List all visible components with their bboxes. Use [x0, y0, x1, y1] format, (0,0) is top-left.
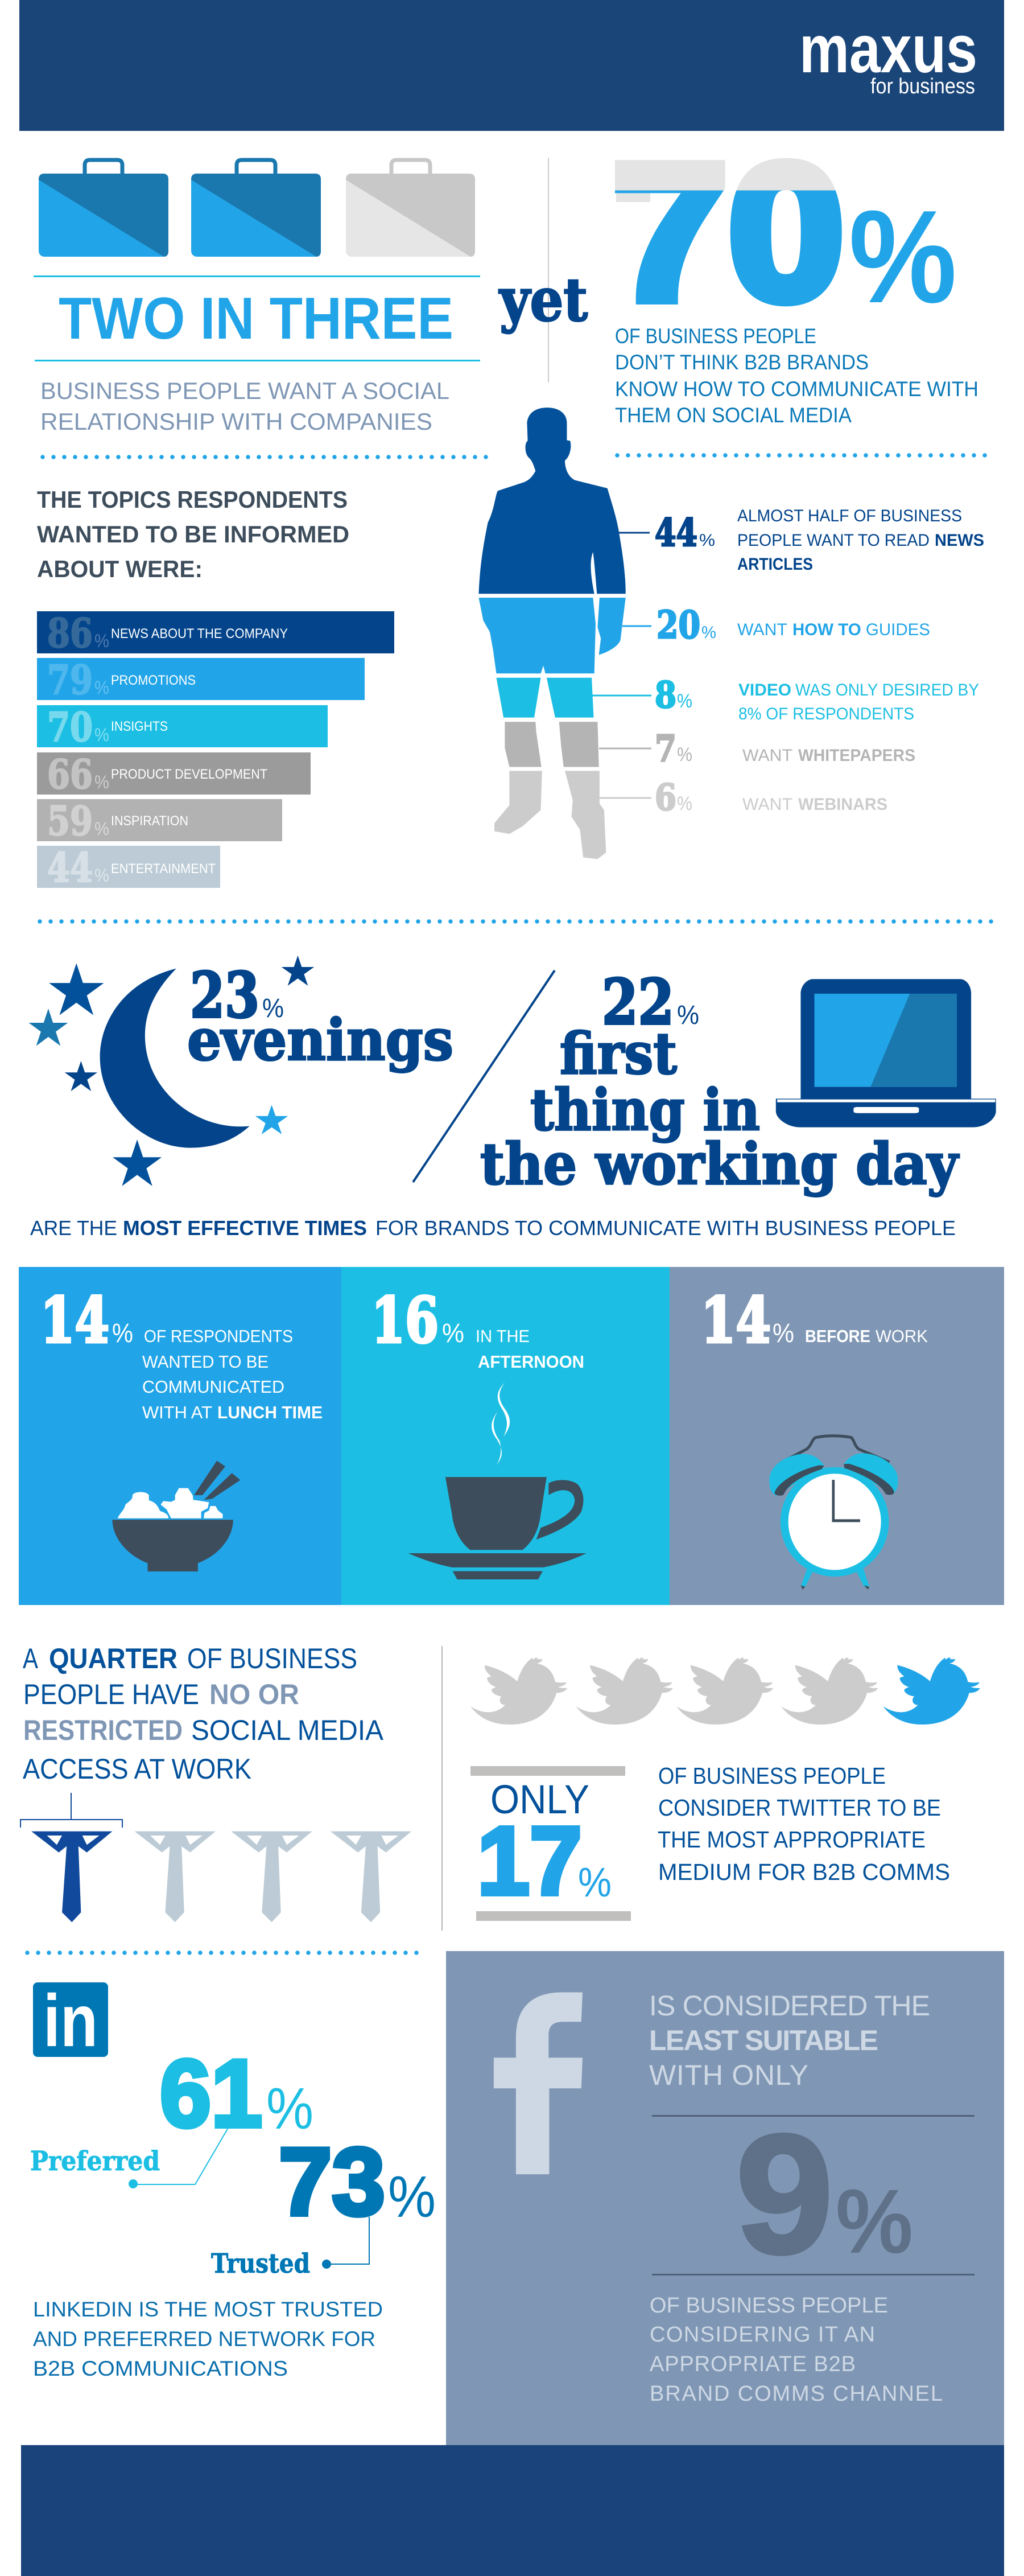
yet connector word: yet: [498, 265, 588, 335]
text: twitter description: MEDIUM FOR B2B COMMS: [658, 1859, 950, 1885]
text: a quarter have restricted access: QUARTER: [49, 1643, 177, 1674]
stat: 20 percent how to guides: %: [701, 623, 716, 642]
stat: 6 percent webinars: WEBINARS: [798, 795, 887, 814]
text: linkedin description: [33, 2298, 383, 2380]
bar: inspiration: %: [94, 818, 109, 839]
text: most effective times: [30, 1216, 956, 1240]
text: most effective times: MOST EFFECTIVE TIMES: [123, 1216, 367, 1240]
bar chart: topics: [37, 610, 394, 891]
stat: 23 percent evenings: 23: [190, 958, 259, 1032]
text: most effective times: FOR BRANDS TO COMMUNICATE WITH BUSINESS PEOPLE: [375, 1216, 956, 1240]
text: a quarter have restricted access: SOCIAL MEDIA: [191, 1714, 384, 1746]
stat: 20 percent how to guides: [656, 603, 930, 647]
text: a quarter have restricted access: ACCESS AT WORK: [23, 1753, 251, 1785]
stat: 8 percent video: 8% OF RESPONDENTS: [738, 705, 914, 723]
stat: 22 percent first thing in the working day: first: [560, 1020, 677, 1087]
bar: news about the company: [37, 610, 394, 657]
stat: only 17 percent: 17: [477, 1807, 582, 1915]
panel: before work: %: [773, 1318, 794, 1348]
stat: 44 percent news articles: NEWS: [935, 531, 984, 550]
bar: entertainment: [37, 844, 220, 891]
bar: news about the company: NEWS ABOUT THE COMPANY: [111, 626, 288, 641]
stat: 44 percent news articles: ARTICLES: [737, 555, 813, 574]
text: social relationship: RELATIONSHIP WITH COMPANIES: [40, 408, 432, 435]
bar: entertainment: 44: [47, 844, 93, 891]
stat: 61 percent preferred: Preferred: [30, 2146, 160, 2177]
stat: 23 percent evenings: evenings: [187, 1006, 453, 1073]
icon: alarm clock: [769, 1436, 898, 1590]
bar: inspiration: 59: [47, 797, 93, 845]
text: social relationship: [40, 377, 449, 435]
stat: 8 percent video: [655, 674, 979, 723]
stat: 23 percent evenings: %: [262, 993, 284, 1023]
stat: 44 percent news articles: %: [699, 531, 715, 550]
stat: 73 percent trusted: %: [388, 2164, 436, 2229]
bar: insights: 70: [47, 703, 93, 751]
stat: 7 percent whitepapers: WHITEPAPERS: [798, 746, 915, 765]
panel: before work: 14: [701, 1283, 771, 1357]
text: linkedin description: LINKEDIN IS THE MOST TRUSTED: [33, 2298, 383, 2321]
figure: segmented person silhouette: [478, 408, 626, 859]
panel: before work: BEFORE: [805, 1326, 870, 1346]
icon: laptop: [776, 979, 996, 1127]
text: a quarter have restricted access: NO OR: [209, 1678, 299, 1710]
panel: afternoon: 16: [371, 1283, 439, 1357]
panel: lunch time: %: [112, 1318, 133, 1348]
heading: topics: WANTED TO BE INFORMED: [37, 521, 349, 548]
icon: crescent moon and stars: [29, 956, 314, 1186]
header band with logo: [19, 0, 1004, 131]
panel: facebook: LEAST SUITABLE: [649, 2024, 878, 2056]
panel: lunch time: LUNCH TIME: [217, 1402, 323, 1422]
text: 70 percent description: KNOW HOW TO COMMUNICATE WITH: [615, 377, 978, 401]
bar: insights: INSIGHTS: [111, 719, 168, 734]
bar: inspiration: [37, 797, 282, 845]
stat: only 17 percent: [470, 1766, 631, 1921]
stat: 44 percent news articles: [655, 507, 984, 574]
stat: 20 percent how to guides: HOW TO GUIDES: [792, 620, 930, 639]
icon: facebook f: [494, 1993, 583, 2174]
bar: product development: 66: [47, 751, 93, 798]
panel: before work: WORK: [876, 1326, 928, 1346]
stat: 20 percent how to guides: WANT: [737, 620, 787, 639]
logo: maxus: maxus: [799, 11, 977, 87]
stat: 6 percent webinars: [655, 776, 887, 819]
panel: facebook: IS CONSIDERED THE: [649, 1990, 930, 2022]
stat: 22 percent first thing in the working day: 22: [602, 965, 674, 1039]
panel: facebook: %: [836, 2170, 913, 2272]
text: a quarter have restricted access: [23, 1643, 384, 1785]
bar: promotions: PROMOTIONS: [111, 673, 196, 688]
bar: product development: PRODUCT DEVELOPMENT: [111, 767, 267, 782]
stat: 44 percent news articles: PEOPLE WANT TO READ: [737, 531, 930, 550]
bar: news about the company: %: [94, 631, 109, 651]
icon: rice bowl with chopsticks: [112, 1461, 240, 1571]
panel: facebook: OF BUSINESS PEOPLE: [650, 2294, 888, 2318]
stat: 44 percent news articles: ALMOST HALF OF BUSINESS: [737, 507, 962, 525]
text: 70 percent description: OF BUSINESS PEOPLE: [615, 324, 816, 348]
panel: facebook: BRAND COMMS CHANNEL: [650, 2382, 943, 2406]
stat: only 17 percent: %: [578, 1860, 612, 1906]
stat: 8 percent video: 8: [655, 674, 676, 717]
icon: bracket above first tie: [20, 1793, 122, 1828]
text: twitter description: THE MOST APPROPRIATE: [658, 1826, 926, 1853]
stat: 44 percent news articles: 44: [655, 511, 697, 555]
text: social relationship: BUSINESS PEOPLE WANT A SOCIAL: [40, 377, 449, 404]
stat: 61 percent preferred: 61: [160, 2040, 262, 2147]
bar: product development: [37, 751, 311, 798]
stat: only 17 percent: ONLY: [490, 1777, 589, 1822]
bar: entertainment: %: [94, 865, 109, 886]
bar: promotions: 79: [47, 656, 93, 703]
heading: topics: [37, 486, 349, 582]
panel: lunch time: 14: [40, 1283, 109, 1357]
icon: five twitter birds: [470, 1657, 980, 1725]
bar: insights: [37, 703, 328, 751]
panel: afternoon: %: [442, 1318, 464, 1348]
text: twitter description: OF BUSINESS PEOPLE: [658, 1763, 886, 1789]
stat: 61 percent preferred: [30, 2040, 313, 2188]
bar: entertainment: ENTERTAINMENT: [111, 861, 216, 877]
bar: promotions: [37, 656, 365, 703]
stat: 6 percent webinars: 6: [655, 776, 676, 819]
heading: topics: THE TOPICS RESPONDENTS: [37, 486, 348, 513]
heading: two in three: TWO IN THREE: [59, 286, 453, 352]
stat: 7 percent whitepapers: 7: [655, 727, 676, 770]
stat: 22 percent first thing in the working day: %: [677, 999, 699, 1030]
bar: insights: %: [94, 725, 109, 745]
panel: lunch time: WANTED TO BE: [142, 1352, 269, 1372]
stat: 6 percent webinars: WANT: [742, 795, 792, 814]
big stat: 70 percent: [612, 124, 957, 340]
icon: three briefcases: [39, 160, 475, 257]
text: a quarter have restricted access: PEOPLE HAVE: [23, 1678, 199, 1710]
big stat: 70 percent: %: [849, 183, 957, 331]
bar: news about the company: 86: [47, 610, 93, 657]
stat: 61 percent preferred: %: [266, 2076, 313, 2141]
stat: 8 percent video: VIDEO: [738, 681, 791, 699]
stat: 8 percent video: WAS ONLY DESIRED BY: [795, 681, 979, 699]
text: most effective times: ARE THE: [30, 1216, 117, 1240]
big stat: 70 percent: 70: [612, 124, 844, 340]
heading: topics: ABOUT WERE:: [37, 555, 203, 582]
stat: 73 percent trusted: [211, 2128, 436, 2279]
icon: steaming coffee cup: [408, 1382, 587, 1579]
icon: four ties: [31, 1832, 411, 1922]
bar: product development: %: [94, 772, 109, 792]
text: twitter description: CONSIDER TWITTER TO BE: [658, 1795, 941, 1821]
panel: afternoon: AFTERNOON: [478, 1352, 584, 1372]
panel: facebook: [446, 1951, 1004, 2445]
text: linkedin description: B2B COMMUNICATIONS: [33, 2357, 288, 2380]
panel: afternoon: IN THE: [476, 1326, 530, 1346]
text: a quarter have restricted access: A: [23, 1643, 39, 1674]
stat: 6 percent webinars: %: [677, 793, 692, 814]
stat: 7 percent whitepapers: %: [677, 744, 692, 766]
stat: 23 percent evenings: [187, 958, 453, 1073]
panel: lunch time: OF RESPONDENTS: [144, 1326, 293, 1346]
text: a quarter have restricted access: RESTRICTED: [23, 1714, 183, 1746]
panel: lunch time: COMMUNICATED: [142, 1377, 284, 1397]
footer band: [21, 2445, 1004, 2576]
stat: 20 percent how to guides: 20: [656, 603, 700, 647]
stat: 22 percent first thing in the working day: thing in: [530, 1076, 760, 1143]
panel: facebook: CONSIDERING IT AN: [650, 2323, 875, 2347]
text: linkedin description: AND PREFERRED NETWORK FOR: [33, 2327, 375, 2351]
bar: promotions: %: [94, 677, 109, 698]
text: twitter description: [658, 1763, 950, 1885]
bar: inspiration: INSPIRATION: [111, 813, 188, 829]
stat: 73 percent trusted: 73: [279, 2128, 385, 2235]
text: 70 percent description: [615, 324, 978, 427]
panel: lunch time: [19, 1267, 341, 1605]
panel: facebook: 9: [736, 2100, 833, 2289]
stat: 22 percent first thing in the working day: [480, 965, 960, 1198]
panel: afternoon: [341, 1267, 670, 1605]
stat: 22 percent first thing in the working day: the working day: [480, 1130, 960, 1198]
icon: linkedin: in: [43, 1979, 98, 2062]
panel: before work: [670, 1267, 1004, 1605]
stat: 73 percent trusted: Trusted: [211, 2248, 310, 2279]
text: 70 percent description: DON’T THINK B2B BRANDS: [615, 351, 869, 374]
text: 70 percent description: THEM ON SOCIAL MEDIA: [615, 404, 852, 427]
panel: lunch time: WITH AT: [142, 1402, 212, 1422]
logo tagline: for business: [870, 75, 975, 98]
stat: 7 percent whitepapers: [655, 727, 915, 770]
stat: 7 percent whitepapers: WANT: [742, 746, 792, 765]
panel: facebook: APPROPRIATE B2B: [650, 2352, 856, 2376]
text: a quarter have restricted access: OF BUSINESS: [187, 1643, 357, 1674]
stat: 8 percent video: %: [677, 690, 692, 712]
panel: facebook: WITH ONLY: [649, 2059, 808, 2091]
